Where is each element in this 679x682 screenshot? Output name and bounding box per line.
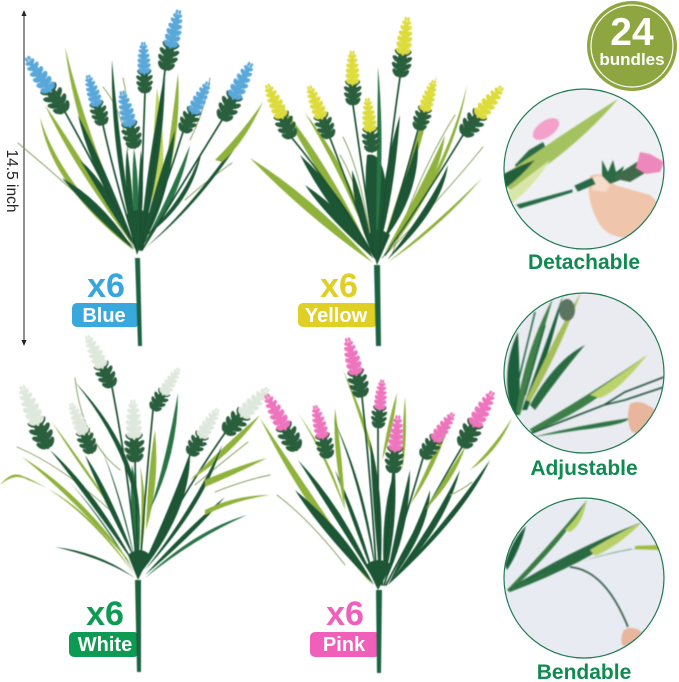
flowers: blue [16,7,262,152]
fingers [621,628,642,648]
caption: adjustable: Adjustable [530,457,638,480]
label: pink tag [310,632,380,657]
leaf: upper [530,355,647,433]
label: yellow quantity: x6 [320,267,358,305]
flowers: yellow [257,16,511,154]
label: white tag [69,632,139,657]
label: yellow tag: Yellow [305,305,368,327]
flowers: white [10,331,277,464]
leaves [505,500,660,592]
photo: adjustable [504,292,664,453]
height arrow [22,10,26,346]
wires [532,377,664,433]
stem [517,178,595,208]
label: white tag: White [78,634,132,656]
label: white quantity: x6 [86,595,124,633]
label: blue tag: Blue [82,305,126,327]
badge: 24 bundles: bundles [599,50,665,69]
leaf cluster [507,292,585,415]
plant: blue lavender [16,7,263,346]
badge: 24 bundles: 24 [610,11,654,54]
caption: detachable: Detachable [528,251,640,274]
badge: 24 bundles [587,1,677,91]
flowers: pink [256,335,503,475]
label: blue quantity: x6 [87,267,125,305]
height label: 14.5 inch [3,150,20,212]
label: blue tag [72,303,140,327]
label: pink tag: Pink [323,634,366,656]
leaf [500,99,618,190]
wire [570,567,628,627]
background flower [514,117,560,168]
label: pink quantity: x6 [326,595,364,633]
held flower [602,152,664,184]
plant: pink lavender [256,335,512,673]
finger [589,174,658,238]
photo: detachable [500,89,664,249]
photo: bendable [504,498,664,658]
fingers [628,402,655,435]
plant: white lavender [0,331,277,672]
plant: yellow lavender [250,16,511,346]
